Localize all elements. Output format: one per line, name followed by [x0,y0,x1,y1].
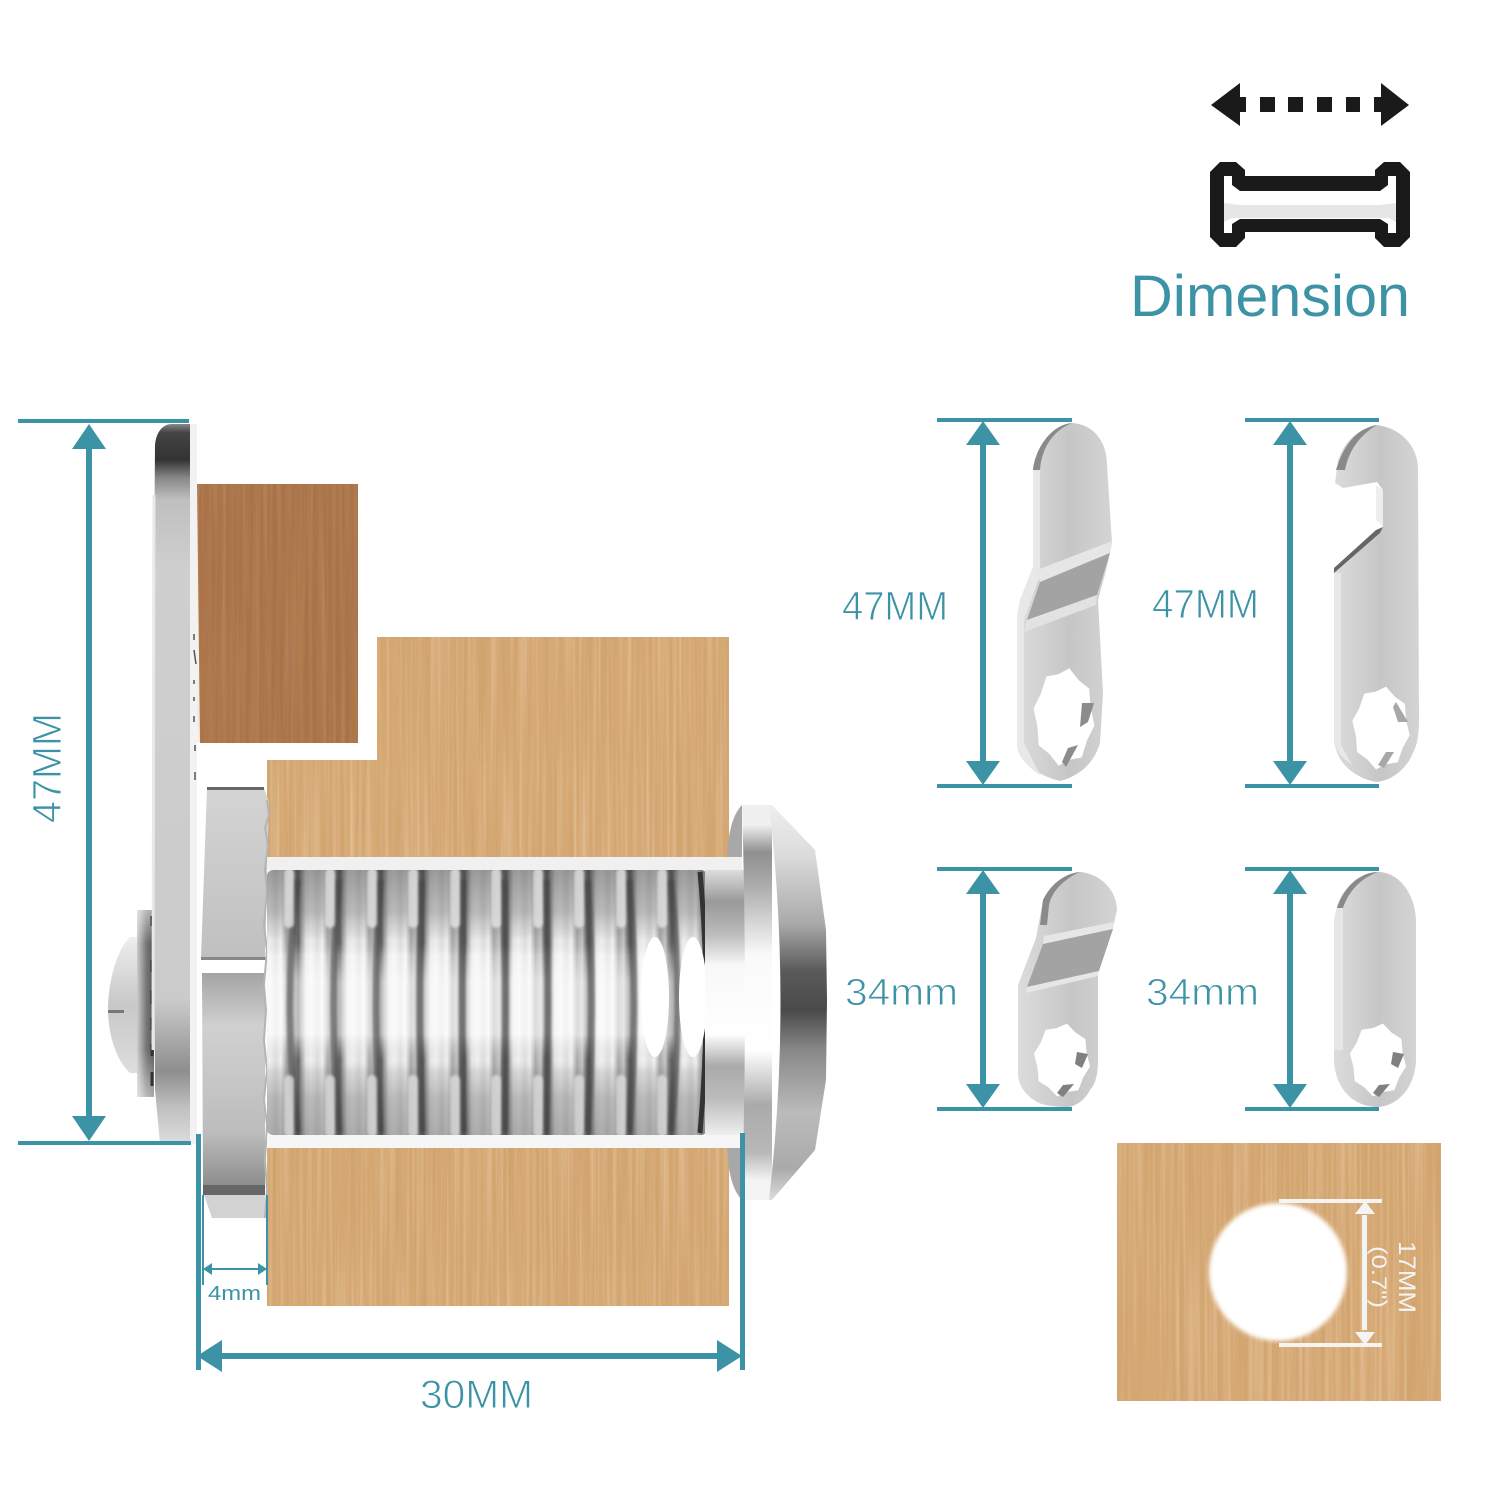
cam body [1334,872,1416,1107]
lock flange [742,805,772,1200]
hole dimension [1279,1199,1382,1347]
cam body [1018,872,1117,1107]
label: (0.7"): (0.7") [1367,1246,1390,1308]
icon: spool profile [1210,162,1410,247]
dimension: panel thickness 4mm [202,1195,268,1305]
cam bend [1026,922,1114,993]
cam body [1017,423,1112,781]
hole bevels [1373,1052,1404,1097]
dimension: 34mm straight cam [1245,867,1379,1111]
dimension: 34mm offset cam [937,867,1072,1111]
dimension: 47MM hook cam [1245,418,1379,788]
coil shadows [290,880,678,1132]
cam body [1334,425,1419,782]
dimension: overall height 47MM [18,419,191,1145]
cam: 47mm offset [842,418,1112,788]
barrel clear band top [267,857,742,870]
cam plate bright edge [153,424,197,1144]
label: 47MM: 47MM [1152,581,1259,627]
cam edge highlights [1334,425,1383,765]
lock cap [769,805,827,1200]
screw washer [137,910,154,1097]
cam edge highlights [1017,423,1072,775]
hole bevels [1057,1052,1088,1097]
dimension: depth 30MM [196,1133,745,1417]
hole bevels [1062,703,1094,767]
cam: 34mm offset [845,867,1117,1111]
barrel clear band bottom [267,1135,742,1148]
cam: 34mm straight [1146,867,1416,1111]
screw dome [108,937,137,1073]
oval highlight [641,937,669,1057]
oval highlight [679,937,707,1057]
icon: dotted double arrow [1211,83,1409,126]
label: 47MM: 47MM [842,583,948,629]
cam bend [1024,541,1112,632]
panel: dark wood door piece [197,484,358,743]
hex nut [201,787,269,1218]
cam: 47mm hook [1152,418,1419,788]
star hole [1345,1017,1411,1103]
icon: dimension legend [1210,83,1410,247]
illustration: cam lock side view [108,424,827,1218]
star hole [1029,1017,1095,1103]
threaded barrel [267,857,742,1148]
drilled hole [1209,1203,1347,1341]
label: 47MM: 47MM [24,713,70,823]
cam plate [153,424,192,1143]
star hole [1347,679,1415,777]
coil crest tops [284,868,667,928]
panel: light wood cabinet cross-section [267,637,729,1306]
label: 17MM: 17MM [1393,1241,1420,1313]
cam edge shadow [1337,872,1378,908]
dimension: 47MM offset cam [937,418,1072,788]
screw slot [108,1010,124,1013]
star hole [1028,660,1100,774]
screw teeth [150,916,154,1086]
barrel collar [705,870,745,1135]
flange shadow slivers [727,805,742,1200]
cam edge highlight [1040,872,1080,925]
nut toothed edge [264,800,269,1218]
heading: Dimension: Dimension [1130,264,1410,329]
label: 30MM: 30MM [420,1373,533,1417]
panel: drill hole size [1117,1143,1441,1401]
wood panel [1117,1143,1441,1401]
cam edge highlight [1334,872,1378,1050]
label: 34mm: 34mm [845,972,958,1014]
coil crest bottoms [284,1075,667,1137]
label: 4mm: 4mm [208,1283,261,1305]
hole bevels [1378,702,1408,768]
label: 34mm: 34mm [1146,972,1259,1014]
